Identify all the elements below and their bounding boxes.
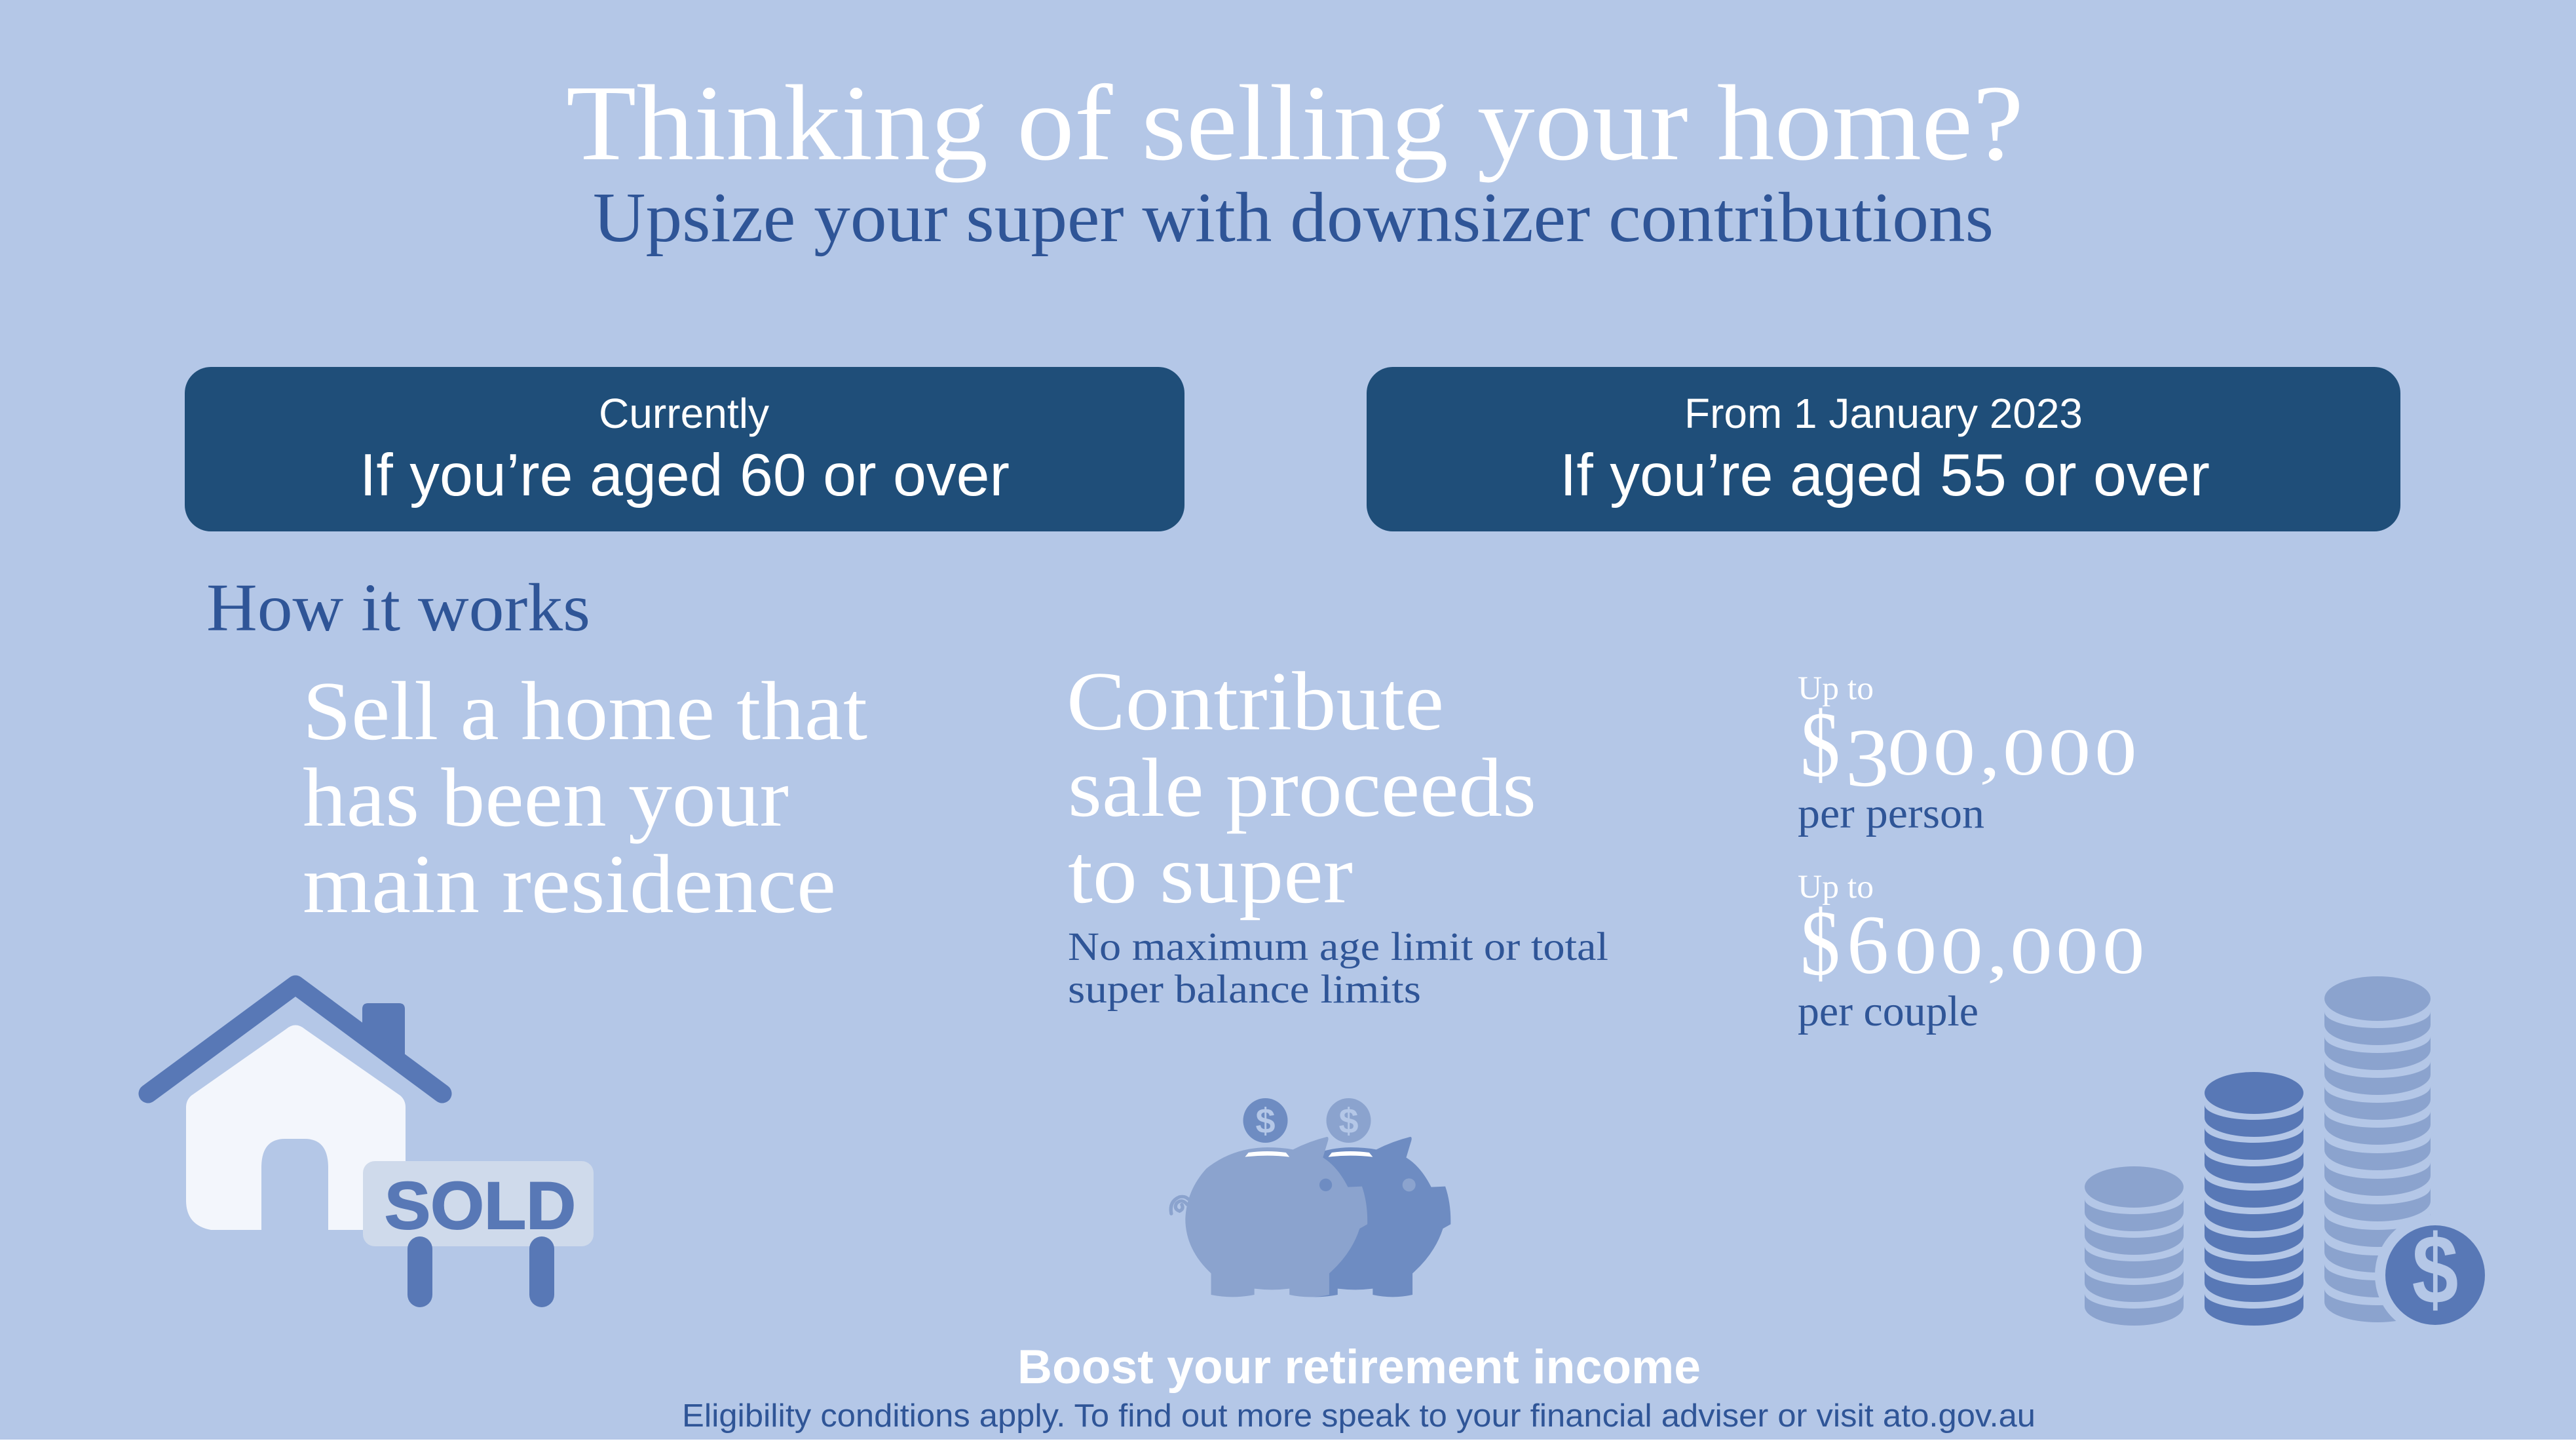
short stack [2085,1166,2184,1326]
right coin [1326,1098,1371,1143]
step 1 text: sell a home: Sell a home that [303,664,867,757]
step 2 text: contribute proceeds: Contribute [1067,655,1444,748]
panel date label: Currently [599,390,769,437]
step 1 text: sell a home: main residence [303,837,836,930]
tall stack [2324,976,2431,1322]
panel: from 1 January 2023 [1367,367,2400,531]
sign board [363,1161,594,1246]
chimney [362,1003,405,1065]
icon: coin stacks [2085,976,2495,1335]
amount: per person [1798,670,2137,837]
sign posts [407,1236,554,1307]
roof [148,985,442,1094]
step 2 text: contribute proceeds [1067,655,1536,921]
icon: house with sold sign [148,985,594,1307]
house body [186,1025,406,1230]
amount: per couple: 6 [1847,898,1889,991]
footer disclaimer: Eligibility conditions apply. To find out more speak to your financial adviser or visit ato.gov.au [682,1398,2036,1434]
icon: two piggy banks with coins [1171,1098,1450,1297]
panel date label: From 1 January 2023 [1684,390,2083,437]
amount: per couple: $ [1800,891,1840,995]
dollar coin: $ [2412,1215,2458,1324]
amount: per person: $ [1800,693,1840,796]
panel age label: If you’re aged 55 or over [1560,442,2210,508]
panel: currently [185,367,1184,531]
panel background [1367,367,2400,531]
step 2 note: limits [1068,925,1608,1012]
panel background [185,367,1184,531]
footer headline: Boost your retirement income [1017,1341,1701,1394]
step 2 text: contribute proceeds: to super [1068,828,1353,921]
left piggy bank [1171,1137,1367,1297]
amount: per person: 3 [1846,712,1889,804]
right coin: $ [1338,1101,1359,1141]
amount: per person: per person [1798,790,1984,837]
step 2 note: limits: No maximum age limit or total [1068,925,1608,969]
middle stack [2205,1072,2303,1326]
amount: per couple: per couple [1798,987,1979,1035]
amount: per couple [1798,869,2145,1035]
title: Thinking of selling your home? [566,63,2024,183]
heading: how it works: How it works [206,570,590,645]
dollar coin [2375,1215,2495,1335]
step 1 text: sell a home: has been your [303,751,789,844]
subtitle: Upsize your super with downsizer contributions [593,179,1994,257]
step 2 text: contribute proceeds: sale proceeds [1068,741,1536,834]
sign text: SOLD [385,1168,576,1243]
step 2 note: limits: super balance limits [1068,968,1421,1012]
right piggy bank [1268,1137,1450,1297]
amount: per person: Up to [1798,670,1874,707]
step 1 text: sell a home [303,664,867,930]
left coin: $ [1255,1101,1276,1141]
amount: per couple: 00,000 [1895,914,2145,988]
panel age label: If you’re aged 60 or over [360,442,1010,508]
amount: per couple: Up to [1798,869,1874,906]
amount: per person: 00,000 [1887,716,2137,790]
left coin [1243,1098,1288,1143]
